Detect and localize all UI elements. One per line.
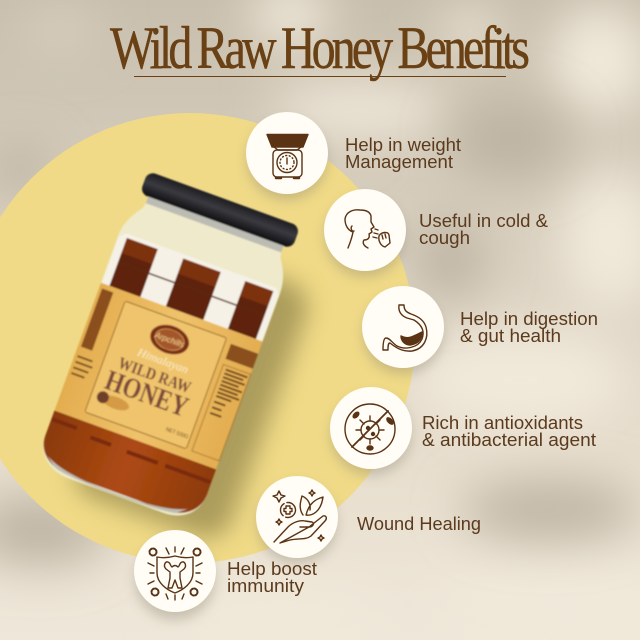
benefit 1: weight management xyxy=(246,112,461,200)
honey at base xyxy=(35,406,218,522)
label: HONEY xyxy=(101,364,193,424)
text: antioxidants xyxy=(422,413,596,450)
icon: coughing person xyxy=(345,210,390,248)
benefit 4: antioxidants xyxy=(330,387,596,475)
text: digestion xyxy=(460,309,598,346)
icon: hand with leaves and plus xyxy=(273,490,326,543)
icon: no bacteria xyxy=(345,404,395,454)
honey jar xyxy=(31,169,334,545)
text: immunity: immunity xyxy=(227,576,304,596)
icon: kitchen scale xyxy=(267,134,308,178)
yellow circle xyxy=(0,113,415,563)
text: cold: Useful in cold & xyxy=(419,211,548,231)
text: cold: cough xyxy=(419,228,470,248)
text: wound: Wound Healing xyxy=(357,514,481,534)
title: Wild Raw Honey Benefits xyxy=(110,15,530,81)
label: WILD RAW xyxy=(116,353,194,397)
benefit 3: digestion xyxy=(362,286,598,374)
text: antioxidants: & antibacterial agent xyxy=(422,430,596,450)
honey stripes behind label xyxy=(109,238,273,340)
text: weight: Help in weight xyxy=(345,135,461,155)
text: weight: Management xyxy=(345,152,453,172)
text: digestion: & gut health xyxy=(460,326,561,346)
label: Himalayan xyxy=(135,345,191,376)
text: digestion: Help in digestion xyxy=(460,309,598,329)
icon: stomach xyxy=(383,305,427,351)
label: NET 500G xyxy=(165,427,189,441)
benefit 6: immunity xyxy=(134,530,317,620)
benefit 2: cold and cough xyxy=(324,189,548,277)
icon: shield with figure xyxy=(148,547,202,600)
text: immunity xyxy=(227,559,317,596)
text: antioxidants: Rich in antioxidants xyxy=(422,413,583,433)
neck ring xyxy=(146,196,284,252)
label xyxy=(54,283,263,469)
text: immunity: Help boost xyxy=(227,559,317,579)
label: Arpchills xyxy=(153,330,185,349)
benefit 5: wound healing xyxy=(256,476,481,564)
text: weight xyxy=(345,135,461,172)
text: cold xyxy=(419,211,548,248)
lid xyxy=(140,171,300,249)
